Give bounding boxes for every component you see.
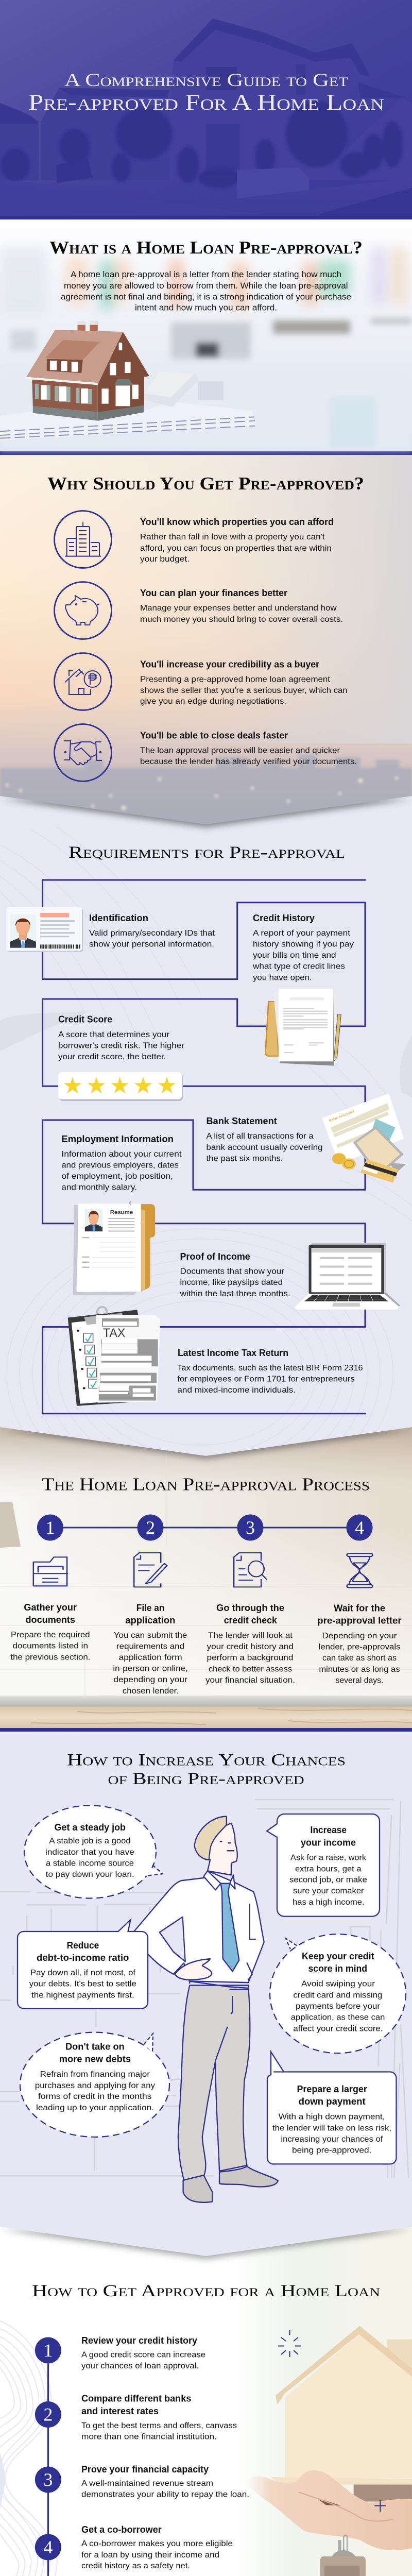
callout: keep your credit score in mind: application, as these can <box>291 2013 385 2022</box>
panel: how to increase your chances <box>0 1732 412 2259</box>
text: increase credibility <box>140 659 347 706</box>
icon: sparkle burst <box>278 2330 301 2357</box>
panel: the home loan pre-approval process <box>0 1427 412 1728</box>
illustration: tax form on clipboard <box>68 1307 160 1406</box>
step 3 text: your credit history and <box>207 1642 294 1651</box>
callout: don't take on more new debts: forms of credit in the months <box>38 2092 152 2101</box>
step 2 <box>81 2394 237 2442</box>
step 1 text: Prepare the required <box>11 1631 90 1639</box>
text: credit history: Credit History <box>253 913 315 923</box>
illustration: laptop <box>294 1243 400 1310</box>
callout: don't take on more new debts: Refrain from financing major <box>40 2070 150 2079</box>
text: proof of income: Documents that show your <box>180 1267 284 1276</box>
intro paragraph <box>61 270 351 312</box>
text: employment information <box>61 1134 182 1192</box>
text: credit score <box>58 1014 184 1061</box>
callout: get a steady job: A stable job is a good <box>49 1837 131 1845</box>
step timeline: 2 <box>146 1517 155 1538</box>
step 4 text: Depending on your <box>322 1632 397 1640</box>
text: plan your finances <box>140 588 343 624</box>
text: proof of income: income, like payslips dated <box>180 1278 283 1287</box>
step 2 text: File an <box>136 1603 164 1613</box>
step 4 text: minutes or as long as <box>319 1665 400 1674</box>
title: Pre-approved For A Home Loan <box>28 90 384 115</box>
icon: piggy bank <box>55 582 111 639</box>
callout: don't take on more new debts: leading up to your application. <box>36 2104 154 2112</box>
illustration: bank statement, money and card: BANK ACCOUNT <box>329 1110 355 1123</box>
divider bar <box>0 451 412 455</box>
step 2 text: application form <box>119 1653 182 1662</box>
heading <box>67 1751 346 1788</box>
text: credit history <box>252 913 354 982</box>
callout: prepare a larger down payment: Prepare a larger <box>297 2084 367 2094</box>
text: credit history: A report of your payment <box>253 929 351 938</box>
text: plan your finances: You can plan your finances better <box>140 588 287 598</box>
callout: prepare a larger down payment: the lender will take on less risk, <box>272 2124 391 2132</box>
rating card: five stars <box>58 1072 183 1101</box>
illustration: tax form on clipboard: TAX <box>103 1326 125 1340</box>
callout: prepare a larger down payment: down payment <box>299 2096 366 2107</box>
callout: prepare a larger down payment: With a high down payment, <box>279 2113 385 2122</box>
illustration: documents in folder <box>265 989 341 1065</box>
text: plan your finances: Manage your expenses better and understand how <box>140 604 337 613</box>
callout: get a steady job: indicator that you have <box>45 1848 134 1857</box>
illustration: ID card <box>6 907 83 952</box>
step 4: Get a co-borrower <box>81 2524 162 2535</box>
callout: increase your income: extra hours, get a <box>295 1865 362 1873</box>
step timeline <box>37 1515 372 1540</box>
step 3 text: The lender will look at <box>208 1631 293 1640</box>
step 2 text: in-person or online, <box>113 1665 188 1673</box>
callout: increase your income: second job, or make <box>289 1875 367 1885</box>
intro paragraph: money you are allowed to borrow from them. While the loan pre-approval <box>64 281 348 291</box>
step timeline: 3 <box>246 1517 255 1538</box>
text: bank statement: bank account usually covering <box>206 1143 322 1152</box>
text: credit score: A score that determines your <box>58 1030 169 1039</box>
icon: handshake <box>55 724 111 781</box>
text: credit score: Credit Score <box>58 1014 112 1025</box>
step 3 <box>81 2464 249 2499</box>
text: know which properties: your budget. <box>140 555 190 564</box>
step 3: demonstrates your ability to repay the loan. <box>81 2490 249 2499</box>
callout: keep your credit score in mind: Keep your credit <box>302 1951 374 1961</box>
step 4: credit history as a safety net. <box>81 2562 190 2570</box>
step 1 text: documents listed in <box>12 1642 88 1651</box>
callout: prepare a larger down payment: increasing your chances of <box>281 2135 383 2144</box>
title: A Comprehensive Guide to Get <box>64 70 348 90</box>
callout: keep your credit score in mind: payments before your <box>296 2002 380 2011</box>
photo: model house on money and papers <box>0 321 255 440</box>
step 4 text: pre-approval letter <box>317 1616 402 1626</box>
icon: plus marks <box>289 2500 386 2576</box>
text: latest income tax return: for employees or Form 1701 for entrepreneurs <box>177 1375 355 1384</box>
step 2: To get the best terms and offers, canvass <box>81 2421 237 2430</box>
callout: get a steady job: to pay down your loan. <box>46 1870 134 1879</box>
illustration: resume in folder: Resume <box>110 1209 133 1215</box>
step 1 text: documents <box>26 1615 75 1625</box>
step 2 text: You can submit the <box>114 1631 187 1640</box>
icon: document and magnifier <box>234 1553 267 1587</box>
callout: keep your credit score in mind: affect your credit score. <box>293 2024 383 2033</box>
icon: buildings <box>55 511 111 568</box>
shelf and wood floor <box>0 1696 412 1728</box>
step 4: A co-borrower makes you more eligible <box>81 2539 233 2548</box>
callout: don't take on more new debts: Don't take on <box>65 2042 125 2052</box>
timeline <box>35 2337 61 2576</box>
step 1: A good credit score can increase <box>81 2350 205 2359</box>
text: know which properties <box>140 517 334 564</box>
intro paragraph: intent and how much you can afford. <box>135 303 277 312</box>
step 4: for a loan by using their income and <box>81 2551 219 2560</box>
text: know which properties: You'll know which properties you can afford <box>140 517 334 527</box>
text: credit history: history showing if you pay <box>253 940 354 949</box>
text: credit history: you have open. <box>253 974 312 982</box>
callout: keep your credit score in mind: Avoid swiping your <box>301 1980 375 1989</box>
step 2 text: application <box>125 1615 175 1625</box>
callout: get a steady job <box>24 1805 163 1898</box>
text: close deals faster <box>140 731 357 766</box>
text: latest income tax return: and mixed-income individuals. <box>177 1386 296 1395</box>
callout: don't take on more new debts: more new debts <box>59 2054 131 2064</box>
step 3: Prove your financial capacity <box>81 2464 209 2475</box>
callout: prepare a larger down payment <box>267 2052 396 2164</box>
text: latest income tax return <box>177 1348 363 1395</box>
illustration: man looking up <box>134 1817 278 2202</box>
lamp shade <box>0 1502 21 1548</box>
illustration: resume in folder <box>73 1202 155 1295</box>
step 3 text: your financial situation. <box>205 1676 295 1685</box>
heading: What is a Home Loan Pre-approval? <box>49 238 363 258</box>
timeline: 2 <box>43 2404 53 2425</box>
icon: hourglass <box>347 1553 372 1588</box>
background line sketch <box>0 1800 408 2178</box>
step 4 <box>81 2524 233 2570</box>
callout: don't take on more new debts <box>20 2032 169 2137</box>
callout: increase your income: sure your comaker <box>293 1887 364 1895</box>
panel: requirements for pre-approval <box>0 796 412 1463</box>
callout: get a steady job: Get a steady job <box>55 1822 126 1833</box>
step timeline: 4 <box>355 1517 364 1538</box>
step 2 text: depending on your <box>113 1675 187 1684</box>
text: employment information: and previous employers, dates <box>61 1161 179 1170</box>
icon: folder <box>33 1557 67 1586</box>
text: identification <box>89 913 215 949</box>
callout: keep your credit score in mind: credit card and missing <box>293 1991 382 1999</box>
panel: how to get approved <box>0 2227 412 2576</box>
step 4 text: lender, pre-approvals <box>318 1643 401 1652</box>
text: employment information: and monthly salary. <box>61 1183 137 1192</box>
panel: what is a home loan pre-approval <box>0 219 412 451</box>
heading: How to Get Approved for a Home Loan <box>32 2282 380 2300</box>
text: credit score: your credit score, the better. <box>58 1053 166 1061</box>
step 3: A well-maintained revenue stream <box>81 2479 213 2488</box>
text: credit history: what type of credit lines <box>252 962 345 971</box>
callout: keep your credit score in mind: score in mind <box>308 1963 367 1974</box>
text: identification: show your personal information. <box>89 940 214 949</box>
callout: get a steady job: a stable income source <box>46 1859 134 1868</box>
step 1 text <box>10 1602 91 1662</box>
callout: keep your credit score in mind <box>270 1934 406 2053</box>
step 1: your chances of loan approval. <box>81 2362 199 2370</box>
step 1 text: the previous section. <box>10 1653 91 1662</box>
text: bank statement <box>206 1116 322 1163</box>
text: bank statement: Bank Statement <box>206 1116 277 1126</box>
heading: Why Should You Get Pre-approved? <box>47 473 364 494</box>
text: increase credibility: shows the seller that you're a serious buyer, which can <box>140 686 347 695</box>
blurred city skyline <box>0 755 412 829</box>
title <box>28 70 384 115</box>
icon: house and peso coin <box>55 653 111 710</box>
callout: increase your income: Ask for a raise, work <box>290 1854 366 1862</box>
step 4 text: Wait for the <box>334 1603 385 1614</box>
callout: reduce debt-to-income ratio: your debts. It's best to settle <box>29 1980 136 1989</box>
callout: don't take on more new debts: purchases and applying for any <box>35 2081 155 2090</box>
panel: hero banner <box>0 0 412 219</box>
connecting outline <box>43 880 366 1414</box>
callout: reduce debt-to-income ratio <box>18 1920 148 2008</box>
step 3 text <box>205 1603 295 1685</box>
text: proof of income: within the last three months. <box>179 1290 290 1298</box>
text: employment information: Employment Information <box>61 1134 174 1144</box>
step 1 <box>81 2335 205 2370</box>
step 2: Compare different banks <box>81 2394 191 2404</box>
heading: of Being Pre-approved <box>108 1770 304 1788</box>
step 3 text: credit check <box>224 1615 278 1625</box>
text: credit history: your bills on time and <box>253 951 336 960</box>
blurred bookshelf background <box>0 247 407 314</box>
callout: increase your income <box>267 1814 380 1917</box>
intro paragraph: A home loan pre-approval is a letter from the lender stating how much <box>71 270 341 279</box>
timeline: 3 <box>43 2469 53 2490</box>
text: increase credibility: Presenting a pre-approved home loan agreement <box>140 675 331 684</box>
text: close deals faster: You'll be able to close deals faster <box>140 731 288 741</box>
text: close deals faster: The loan approval process will be easier and quicker <box>140 747 340 755</box>
text: increase credibility: You'll increase your credibility as a buyer <box>140 659 319 669</box>
text: identification: Valid primary/secondary IDs that <box>89 929 215 938</box>
icon: document and pen <box>134 1553 167 1587</box>
text: latest income tax return: Latest Income Tax Return <box>178 1348 288 1358</box>
step 2 text <box>113 1603 188 1696</box>
divider bar <box>0 1728 412 1732</box>
callout: increase your income: your income <box>301 1837 356 1848</box>
panel: why should you get pre-approved <box>0 455 412 829</box>
step 2: more than one financial institution. <box>81 2433 217 2442</box>
step 1: Review your credit history <box>81 2335 197 2346</box>
text: proof of income: Proof of Income <box>180 1251 250 1262</box>
silhouette: suburban house street <box>0 19 412 216</box>
text: know which properties: Rather than fall in love with a property you can't <box>140 533 325 541</box>
text: bank statement: the past six months. <box>206 1154 283 1163</box>
callout: increase your income: Increase <box>310 1825 347 1835</box>
step timeline: 1 <box>45 1517 55 1538</box>
text: latest income tax return: Tax documents, such as the latest BIR Form 2316 <box>177 1364 363 1372</box>
timeline: 4 <box>43 2537 53 2557</box>
text: plan your finances: much money you should bring to cover overall costs. <box>140 615 343 624</box>
text: employment information: of employment, job position, <box>61 1172 173 1181</box>
step 3 text: perform a background <box>207 1654 293 1663</box>
text: know which properties: afford, you can focus on properties that are within <box>140 544 332 553</box>
callout: prepare a larger down payment: being pre-approved. <box>292 2146 371 2155</box>
step 2: and interest rates <box>81 2406 159 2416</box>
callout: increase your income: has a high income. <box>293 1898 365 1907</box>
timeline: 1 <box>43 2340 53 2361</box>
step 4 text: several days. <box>336 1676 383 1685</box>
photo: wooden house held by a hand with keys <box>247 2326 412 2576</box>
step 2 text: chosen lender. <box>123 1687 179 1696</box>
bottom bar <box>0 216 412 219</box>
step 4 text <box>317 1603 402 1685</box>
heading: Requirements for Pre-approval <box>68 843 345 862</box>
callout: reduce debt-to-income ratio: debt-to-income ratio <box>37 1953 129 1963</box>
step 3 text: Go through the <box>216 1603 284 1613</box>
text: credit score: borrower's credit risk. The higher <box>58 1042 184 1050</box>
callout: reduce debt-to-income ratio: Reduce <box>67 1940 99 1951</box>
step 4 text: can take as short as <box>322 1654 397 1663</box>
step 2 text: requirements and <box>116 1642 184 1651</box>
illustration: bank statement, money and card <box>322 1093 406 1183</box>
text: employment information: Information about your current <box>61 1150 182 1159</box>
callout: reduce debt-to-income ratio: the highest payments first. <box>31 1991 134 1999</box>
text: close deals faster: because the lender has already verified your documents. <box>140 757 357 766</box>
step 3 text: check to better assess <box>209 1665 292 1673</box>
heading: The Home Loan Pre-approval Process <box>42 1475 370 1495</box>
faint swirl line pattern <box>0 827 412 1517</box>
text: bank statement: A list of all transactions for a <box>206 1132 314 1141</box>
heading: How to Increase Your Chances <box>67 1751 346 1769</box>
callout: reduce debt-to-income ratio: Pay down all, if not most, of <box>30 1969 136 1977</box>
text: increase credibility: give you an edge during negotiations. <box>140 697 286 706</box>
step 1 text: Gather your <box>24 1602 77 1613</box>
intro paragraph: agreement is not final and binding, it is a strong indication of your purchase <box>61 293 351 302</box>
text: identification: Identification <box>89 913 148 923</box>
text: proof of income <box>179 1251 290 1298</box>
